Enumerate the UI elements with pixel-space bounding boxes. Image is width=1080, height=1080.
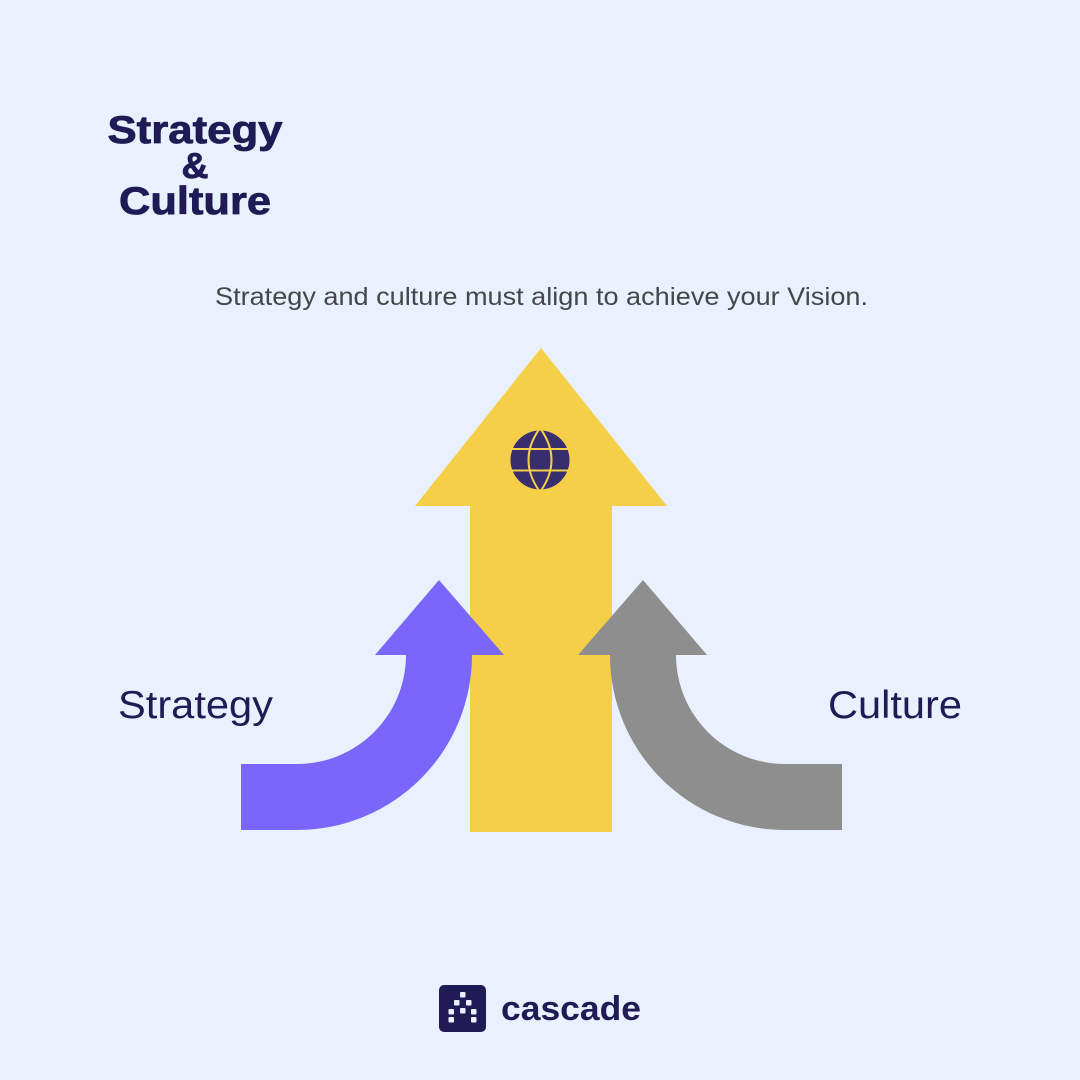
icon: globe (508, 428, 572, 492)
label: culture: Culture (828, 684, 962, 727)
logo wordmark: cascade (501, 990, 641, 1028)
title: Strategy (108, 109, 283, 152)
logo: cascade (439, 985, 641, 1032)
logo mark (439, 985, 486, 1032)
title: Culture (119, 180, 271, 223)
arrow: vision (yellow) (415, 348, 667, 832)
subtitle: Strategy and culture must align to achieve your Vision. (215, 283, 868, 311)
arrow: culture (gray) (578, 580, 842, 830)
title (108, 109, 283, 223)
arrow: strategy (purple) (241, 580, 504, 830)
title: & (182, 145, 208, 186)
label: strategy: Strategy (118, 684, 274, 727)
